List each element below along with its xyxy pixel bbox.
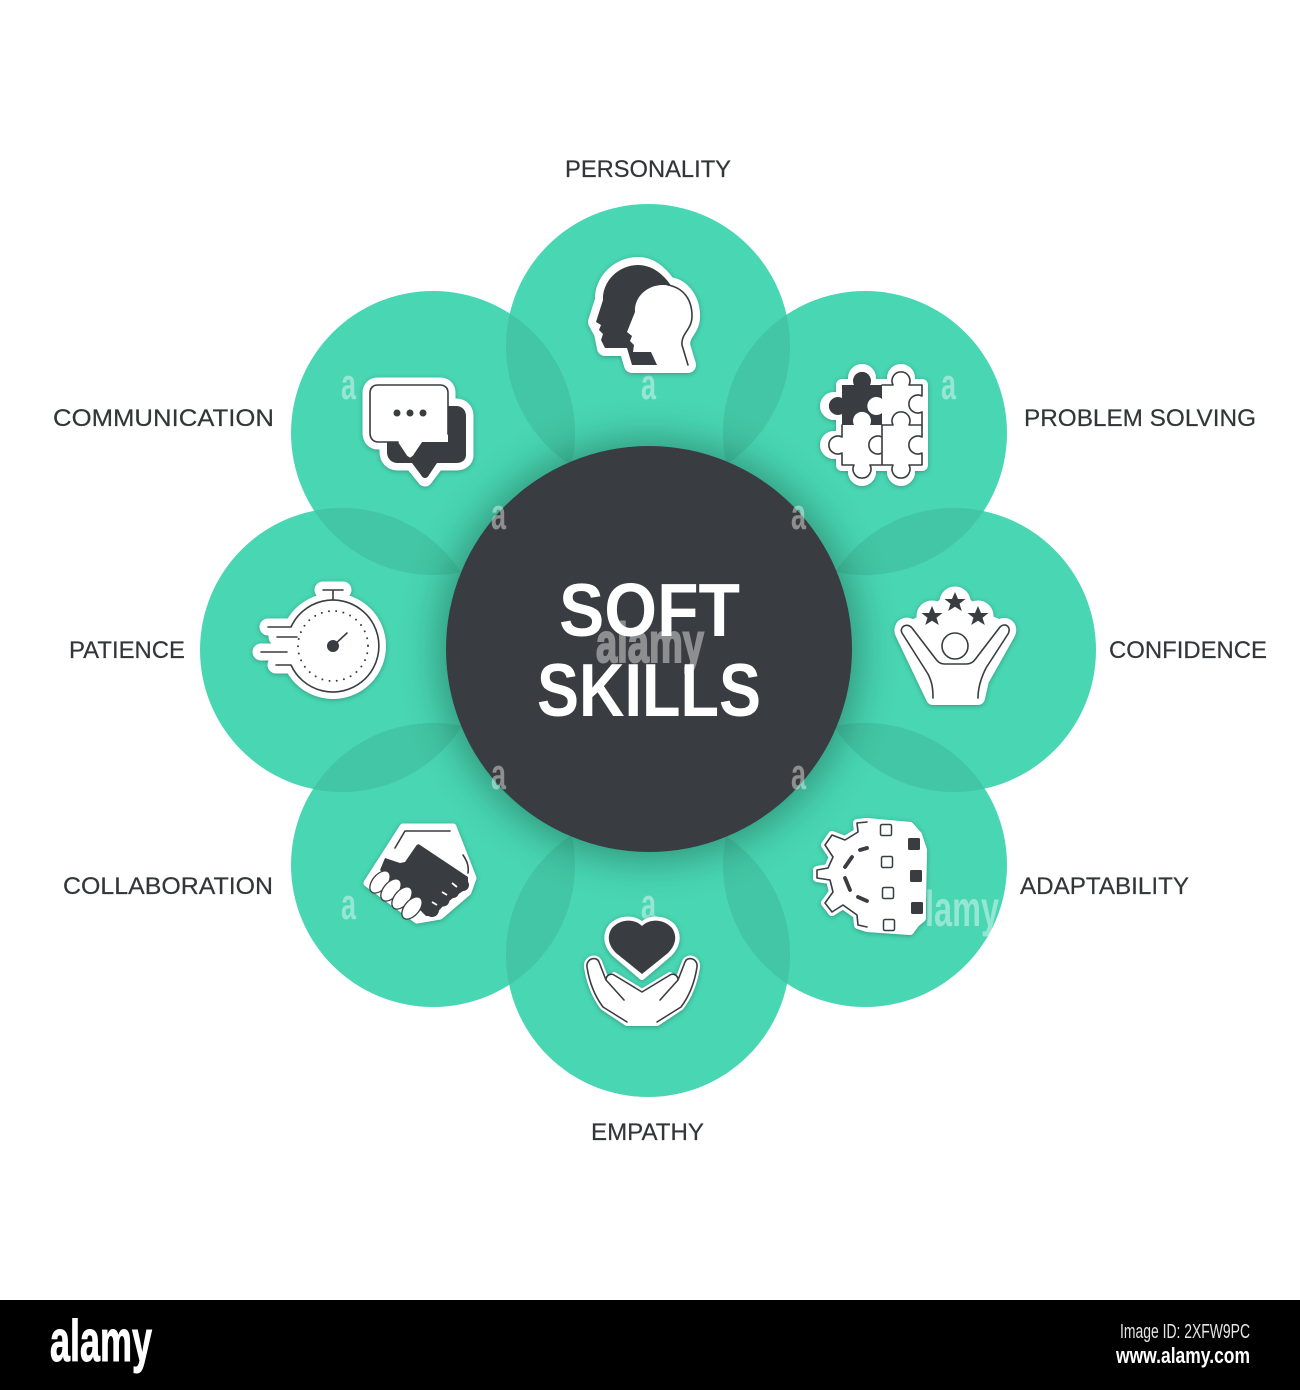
petal: communication	[291, 291, 575, 575]
petal: empathy	[506, 813, 790, 1097]
petal ring	[200, 204, 1096, 1097]
watermark marks: a	[491, 750, 506, 799]
label: patience: PATIENCE	[69, 637, 185, 664]
petal: confidence	[812, 508, 1096, 792]
footer bar	[0, 1300, 1300, 1390]
petal overlaps	[314, 314, 984, 984]
petal: collaboration	[291, 723, 575, 1007]
watermark marks: alamy	[596, 611, 704, 674]
icon: chat bubbles	[370, 385, 466, 479]
watermark marks: lamy	[925, 881, 999, 937]
icon: stopwatch	[261, 590, 379, 692]
icon: confidence person	[901, 588, 1009, 698]
watermark marks: a	[641, 880, 656, 929]
petal: personality	[506, 204, 790, 488]
petal: adaptability	[723, 723, 1007, 1007]
icon: personality heads	[596, 265, 692, 365]
label: confidence: CONFIDENCE	[1109, 637, 1267, 664]
label: problem solving: PROBLEM SOLVING	[1024, 405, 1256, 432]
watermark marks: a	[791, 490, 806, 539]
footer url: www.alamy.com	[1115, 1343, 1250, 1368]
label: empathy: EMPATHY	[591, 1119, 704, 1146]
label: personality: PERSONALITY	[565, 156, 731, 183]
watermark marks	[341, 360, 999, 937]
center shadow	[437, 438, 861, 862]
label: collaboration: COLLABORATION	[63, 873, 273, 900]
center circle	[446, 446, 852, 852]
label: adaptability: ADAPTABILITY	[1020, 873, 1189, 900]
watermark marks: a	[791, 750, 806, 799]
watermark marks: a	[641, 360, 656, 409]
icon: handshake	[366, 827, 473, 923]
center title	[537, 568, 761, 732]
center title: SKILLS	[537, 648, 761, 732]
petal: problem solving	[723, 291, 1007, 575]
icon: heart in hands	[587, 920, 697, 1023]
label: communication: COMMUNICATION	[53, 405, 274, 432]
watermark marks: a	[341, 360, 356, 409]
footer logo: alamy	[50, 1309, 152, 1374]
watermark marks: a	[941, 360, 956, 409]
icon: adaptability gear	[817, 822, 923, 931]
petal: patience	[200, 508, 484, 792]
center title: SOFT	[559, 568, 740, 652]
watermark marks: a	[341, 880, 356, 929]
watermark marks: a	[491, 490, 506, 539]
icon: puzzle	[826, 370, 922, 480]
